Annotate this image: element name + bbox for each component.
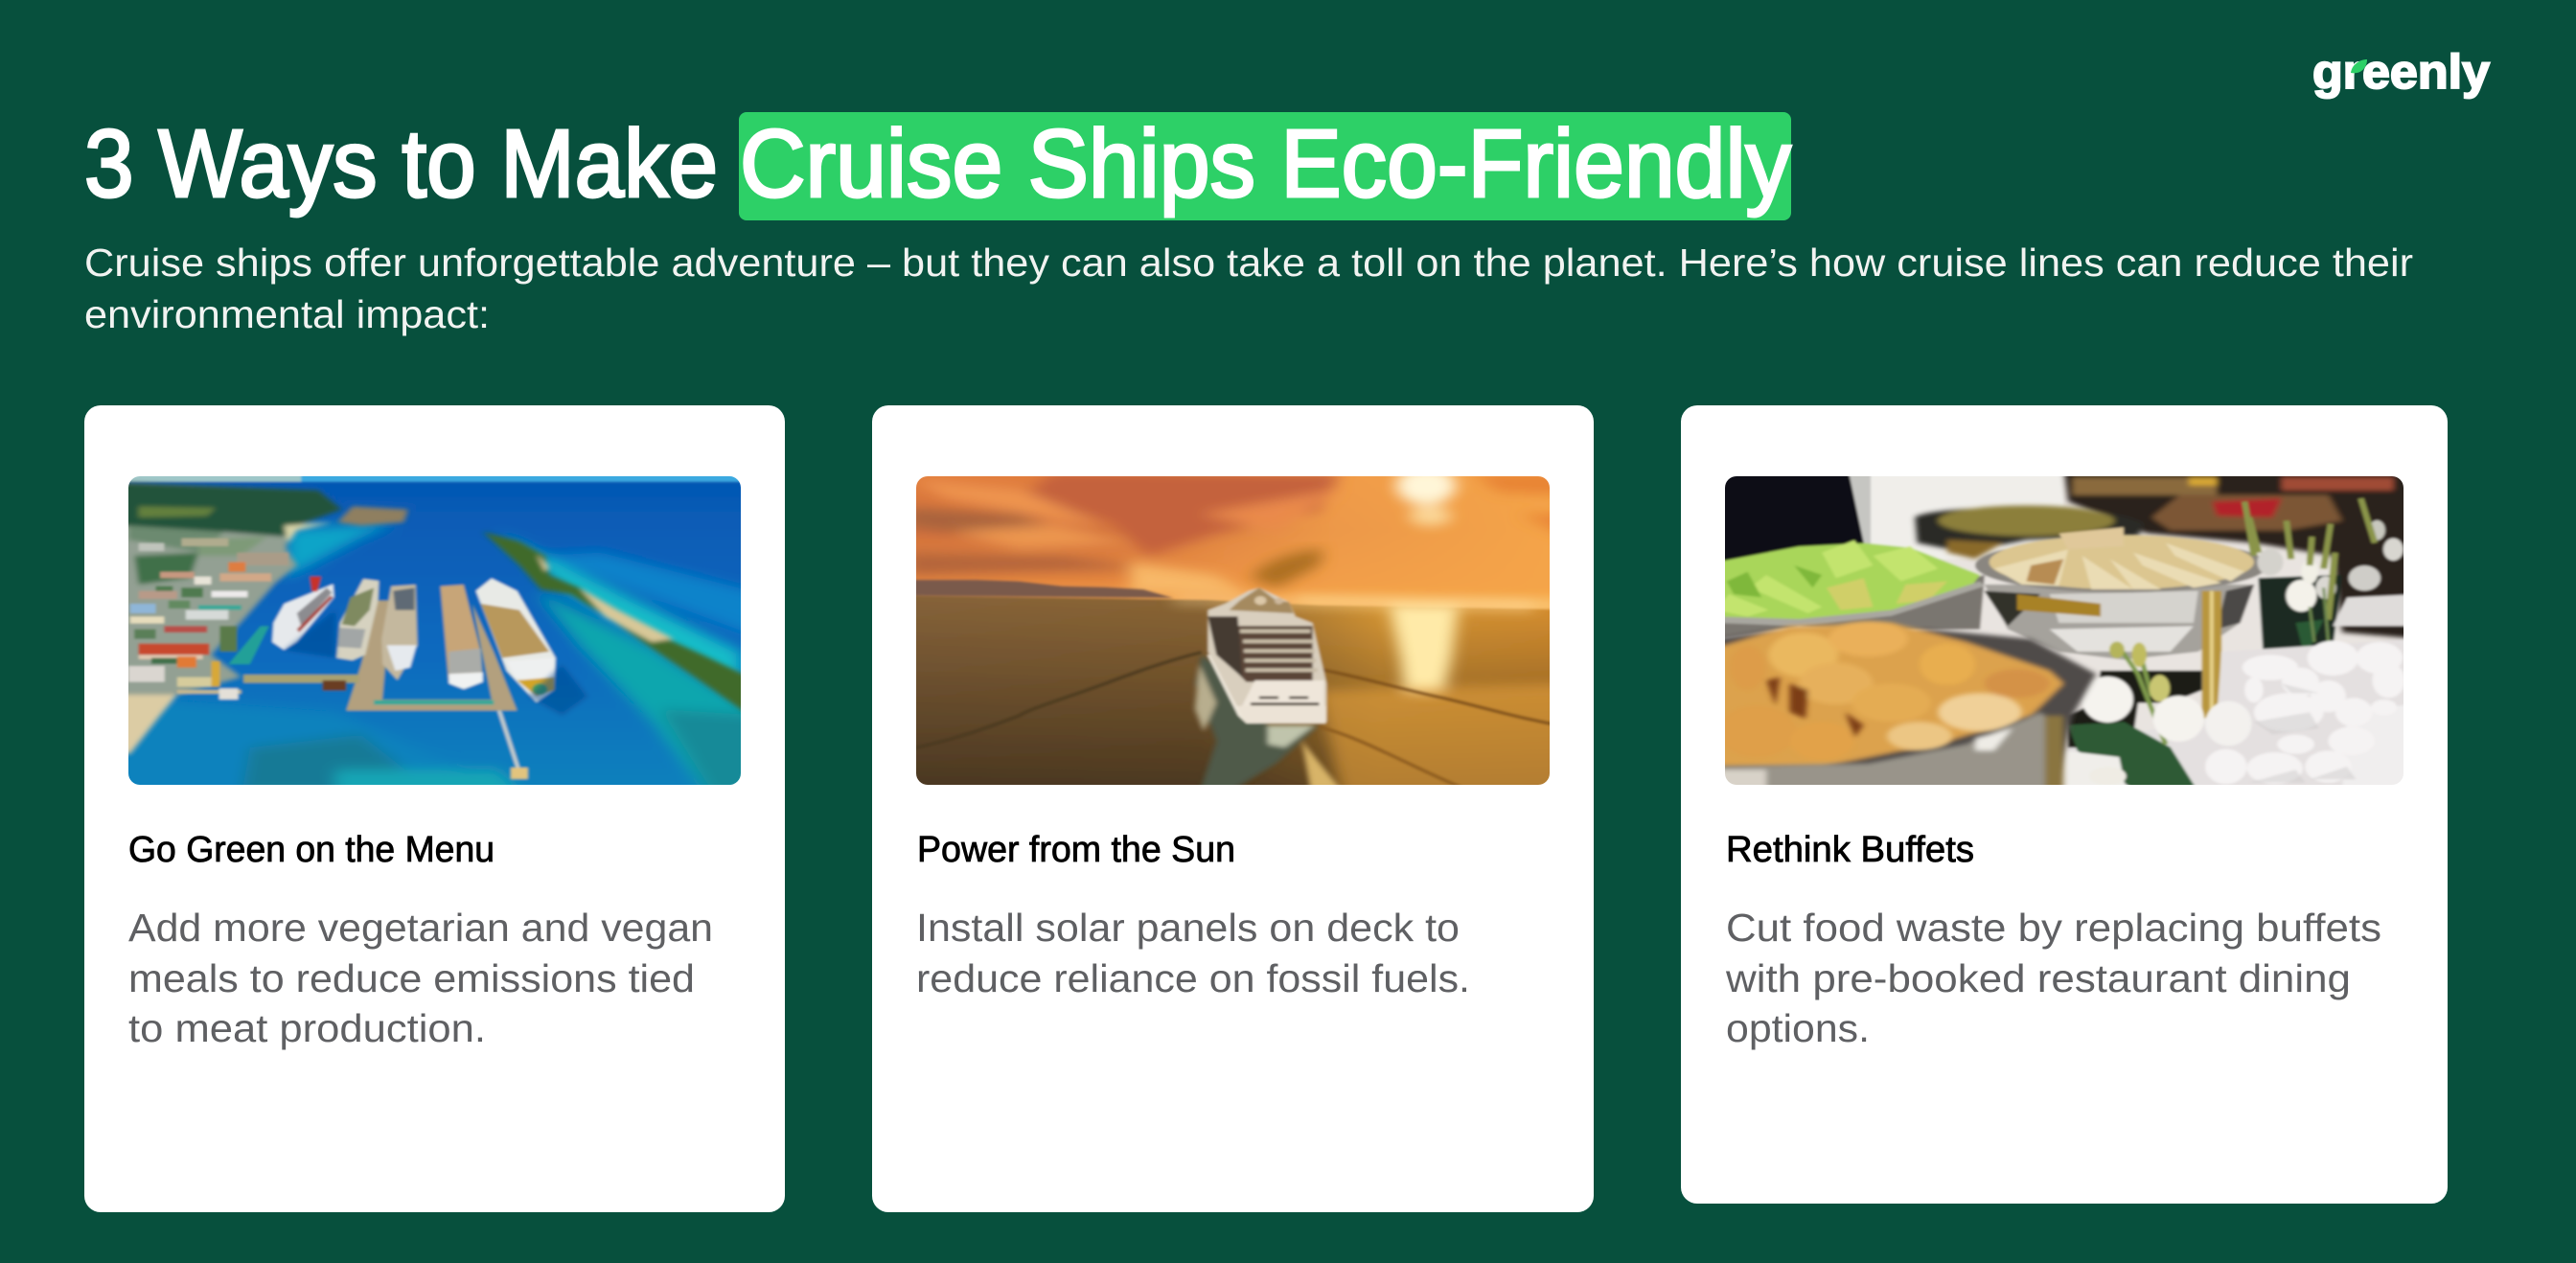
white stones <box>2200 638 2404 785</box>
stand base and flowers front <box>2061 642 2252 792</box>
subtitle: Cruise ships offer unforgettable adventure – but they can also take a toll on the planet. Here’s how cruise lines can reduce their <box>84 241 2413 285</box>
panel: card 1 Go Green on the Menu <box>84 405 785 1212</box>
card body text <box>1725 906 2381 1050</box>
title highlight box <box>739 112 1791 220</box>
card body text: options. <box>1726 1006 1870 1050</box>
image: aerial view of cruise ships docked <box>128 476 741 785</box>
logo: greenly: greenly <box>2312 45 2490 99</box>
card body text: meals to reduce emissions tied <box>128 956 695 1000</box>
card body text: Install solar panels on deck to <box>916 906 1460 950</box>
card body text: with pre-booked restaurant dining <box>1725 956 2351 1000</box>
lettuce bowl <box>1715 540 1985 639</box>
card title: Go Green on the Menu <box>128 830 494 870</box>
subtitle <box>84 241 2413 336</box>
card title: Rethink Buffets <box>1726 830 1974 870</box>
card body text <box>128 906 713 1050</box>
card body text: Cut food waste by replacing buffets <box>1726 906 2381 950</box>
card title: Power from the Sun <box>917 830 1235 870</box>
card body text: reduce reliance on fossil fuels. <box>916 956 1470 1000</box>
card body text: Add more vegetarian and vegan <box>128 906 713 950</box>
panel: card 3 Rethink Buffets <box>1681 405 2448 1204</box>
wakes <box>908 653 1567 789</box>
image: cruise ship at sunset <box>916 476 1550 785</box>
card body text <box>916 906 1470 1000</box>
panel: card 2 Power from the Sun <box>872 405 1594 1212</box>
vase and flowers right <box>2244 498 2417 658</box>
title text: Cruise Ships Eco-Friendly <box>740 110 1791 218</box>
title text: 3 Ways to Make <box>84 110 718 218</box>
title <box>84 110 1791 220</box>
fried food bowl <box>1725 620 2100 770</box>
ship <box>1207 587 1326 723</box>
ships <box>272 577 556 702</box>
icon: logo leaf <box>2351 59 2367 73</box>
docks <box>177 601 528 779</box>
image: food buffet <box>1715 467 2417 795</box>
subtitle: environmental impact: <box>84 292 490 336</box>
back bowl <box>1915 505 2145 559</box>
wraps bowl <box>1975 527 2267 738</box>
card body text: to meat production. <box>128 1006 486 1050</box>
